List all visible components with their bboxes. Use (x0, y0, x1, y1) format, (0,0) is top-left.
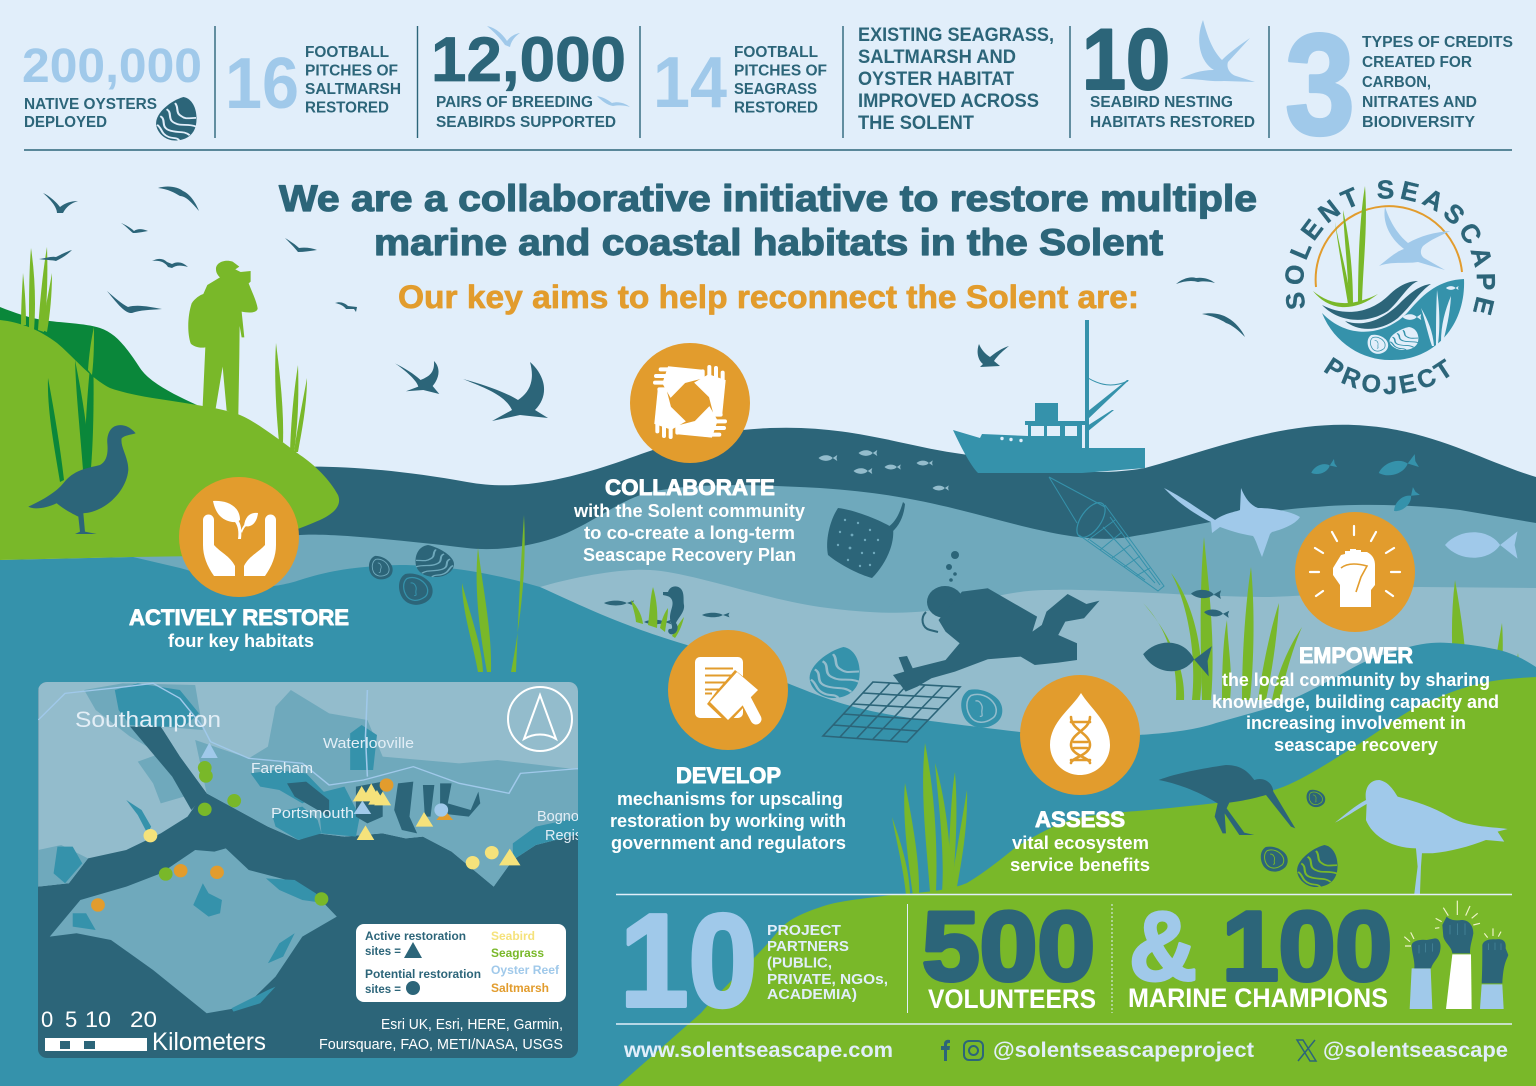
icon: hands holding seedling (203, 501, 276, 576)
stat: 16 football pitches of saltmarsh: SALTMARSH (305, 81, 401, 98)
stat: 16 football pitches of saltmarsh: RESTORED (305, 100, 389, 116)
stat: 16 football pitches of saltmarsh (225, 44, 401, 124)
aim text: develop: DEVELOP (676, 763, 781, 788)
map: place names: Fareham (251, 761, 313, 777)
aim text: assess: service benefits (1010, 855, 1150, 875)
curlew: dark wader (1159, 765, 1295, 835)
map: place names: Regis (545, 828, 582, 844)
icon: document and gavel (695, 657, 760, 724)
map: legend: Seagrass (491, 948, 544, 960)
aim text: assess (1010, 807, 1150, 875)
map: place names: Waterlooville (323, 736, 414, 752)
reeds: top of hill (21, 247, 52, 332)
aim text: develop: mechanisms for upscaling (617, 789, 843, 809)
hill: dark green back slope (0, 307, 197, 405)
aim text: empower: knowledge, building capacity and (1212, 692, 1499, 712)
shark (1164, 488, 1300, 557)
wave: dark teal sea surface (290, 425, 1536, 600)
stat: 10 seabird nesting habitats: HABITATS RESTORED (1090, 114, 1255, 131)
stat: existing habitat improved: IMPROVED ACROSS (858, 91, 1039, 112)
stat: 10 project partners: PROJECT (767, 923, 841, 939)
seagrass at seabed right (1452, 580, 1522, 700)
map: legend (356, 924, 566, 1002)
survey quadrat grid (823, 682, 960, 742)
bottom stats (616, 887, 1512, 1062)
map: place names: Southampton (75, 707, 221, 732)
seagrass: centre blades (462, 515, 525, 672)
icon: x (1297, 1040, 1316, 1061)
map: isle of wight (50, 848, 337, 1013)
stat: 10 project partners: PRIVATE, NGOs, (767, 972, 888, 988)
stat: 10 seabird nesting habitats: 10 (1082, 12, 1170, 108)
map: attribution: Esri UK, Esri, HERE, Garmin, (381, 1016, 563, 1033)
aim text: empower: EMPOWER (1299, 643, 1413, 668)
aim text: empower: increasing involvement in (1246, 713, 1466, 733)
stat: 10 project partners: (PUBLIC, (767, 956, 832, 972)
stat: 100 marine champions (1128, 891, 1392, 1013)
map: legend: sites = (365, 946, 401, 958)
stat: 14 football pitches of seagrass: PITCHES OF (734, 62, 827, 80)
seagrass: lower blades (892, 743, 967, 896)
goose silhouette (28, 425, 136, 534)
stat: 3 types of credits: TYPES OF CREDITS (1362, 34, 1513, 51)
aim: assess (1020, 675, 1140, 795)
aim: develop (668, 630, 788, 750)
stats strip (22, 4, 1513, 165)
stat: 100 marine champions: MARINE CHAMPIONS (1128, 983, 1388, 1013)
hill: green foreground (0, 320, 339, 560)
stat: 10 project partners: ACADEMIA) (767, 987, 857, 1003)
icon: facebook (941, 1040, 950, 1061)
aim text: actively restore: ACTIVELY RESTORE (129, 605, 349, 630)
stat: 12,000 pairs of breeding seabirds: PAIRS OF BREEDING (436, 94, 593, 111)
seahorse and sea plants (631, 586, 684, 638)
birds in the sky (39, 187, 1245, 421)
heading (279, 178, 1257, 263)
project logo: PROJECT (1324, 357, 1450, 394)
wave: light teal mid water (0, 485, 1536, 700)
aim text: develop: restoration by working with (610, 811, 846, 831)
aim text: collaborate: with the Solent community (573, 501, 805, 521)
stat: 3 types of credits: NITRATES AND (1362, 94, 1477, 111)
aim text: empower: the local community by sharing (1222, 670, 1490, 690)
footer links: @solentseascapeproject (993, 1039, 1254, 1062)
stat: existing habitat improved (858, 25, 1054, 134)
aim text: collaborate: COLLABORATE (605, 475, 775, 500)
map: place names (75, 707, 584, 844)
reeds: dark green on hill (48, 345, 94, 482)
stat: 16 football pitches of saltmarsh: 16 (225, 44, 299, 124)
fishing boat (953, 320, 1145, 473)
aim text: collaborate: to co-create a long-term (584, 523, 795, 543)
stingray (827, 502, 905, 578)
map: harbours and water (130, 727, 480, 833)
stat: 500 volunteers: VOLUNTEERS (928, 984, 1096, 1014)
icon: raised fists (1404, 901, 1508, 1009)
stat: 200,000 native oysters (22, 40, 202, 140)
map: scale bar: 10 (85, 1007, 111, 1032)
aim text: develop (610, 763, 846, 853)
icon: instagram (964, 1041, 983, 1060)
stat: 14 football pitches of seagrass: FOOTBALL (734, 44, 818, 61)
map panel (38, 682, 584, 1058)
map: suburban land (38, 683, 582, 887)
map: scale bar: 0 (41, 1007, 53, 1032)
stat: existing habitat improved: EXISTING SEAGRASS, (858, 25, 1054, 46)
aim: collaborate (630, 343, 750, 463)
aim text: assess: vital ecosystem (1012, 833, 1149, 853)
footer links: www.solentseascape.com (623, 1039, 893, 1062)
stat: 10 seabird nesting habitats (1082, 12, 1255, 131)
map: compass (508, 687, 572, 751)
map: urban areas (54, 683, 582, 883)
shoal of fish (604, 450, 1518, 676)
stat: 12,000 pairs of breeding seabirds: SEABIRDS SUPPORTED (436, 114, 616, 131)
stat: 10 project partners (620, 887, 888, 1034)
aim text: collaborate (573, 475, 805, 565)
stat: 100 marine champions: & (1129, 891, 1197, 1001)
aim: empower (1295, 512, 1415, 632)
stat: 14 football pitches of seagrass: RESTORED (734, 100, 818, 116)
wave: pale seabed water (500, 570, 1536, 760)
map: scale bar (41, 1007, 266, 1056)
map: place names: Portsmouth (271, 806, 354, 822)
wave: teal lower water (0, 557, 1536, 1086)
stat: 100 marine champions: 100 (1222, 891, 1392, 1001)
stat: 14 football pitches of seagrass: 14 (653, 43, 727, 123)
stat: 12,000 pairs of breeding seabirds (431, 25, 630, 131)
seagrass clump behind teal wave (1143, 537, 1302, 700)
map: roads (38, 683, 582, 793)
aim text: actively restore (129, 605, 349, 651)
map: place names: Bognor (537, 809, 584, 825)
footer links (623, 1039, 1508, 1062)
reed tip over dark slope (88, 327, 94, 375)
map: attribution (319, 1016, 563, 1053)
stat: 16 football pitches of saltmarsh: FOOTBALL (305, 44, 389, 61)
subheading: Our key aims to help reconnect the Solent are: (398, 279, 1139, 315)
stat: 3 types of credits (1285, 4, 1513, 165)
trawl net (1049, 477, 1164, 591)
map: legend: sites = (365, 984, 401, 996)
stat: 14 football pitches of seagrass (653, 43, 827, 123)
stat: 200,000 native oysters: 200,000 (22, 40, 202, 93)
aim text: develop: government and regulators (611, 833, 846, 853)
heading: marine and coastal habitats in the Solent (374, 222, 1163, 263)
map: scale bar: Kilometers (152, 1028, 266, 1056)
stat: 10 project partners: PARTNERS (767, 939, 849, 955)
stat: existing habitat improved: THE SOLENT (858, 113, 974, 134)
map: scale bar: 5 (65, 1007, 77, 1032)
reeds: right of birdwatcher (275, 343, 307, 452)
map: legend: Active restoration (365, 931, 466, 943)
aim text: empower: seascape recovery (1274, 735, 1438, 755)
stat: 16 football pitches of saltmarsh: PITCHES OF (305, 62, 398, 80)
map: legend: Seabird (491, 931, 535, 943)
map: mainland (38, 682, 582, 887)
icon: raised fist with rays (1310, 526, 1400, 607)
heading: We are a collaborative initiative to restore multiple (279, 178, 1257, 219)
oystercatcher: light wader (1335, 780, 1508, 894)
footer links: @solentseascape (1323, 1039, 1508, 1062)
map: scale bar: 20 (130, 1007, 157, 1032)
stat: 3 types of credits: CARBON, (1362, 74, 1431, 91)
project logo (1285, 180, 1496, 394)
aim text: collaborate: Seascape Recovery Plan (583, 545, 796, 565)
birdwatcher silhouette (188, 261, 258, 416)
aim text: actively restore: four key habitats (168, 631, 314, 651)
logo ring text: SOLENT SEASCAPE (1285, 180, 1496, 316)
stat: 3 types of credits: BIODIVERSITY (1362, 114, 1475, 131)
map: attribution: Foursquare, FAO, METI/NASA, USGS (319, 1036, 563, 1053)
aim: actively restore (179, 477, 299, 597)
aim text: assess: ASSESS (1035, 807, 1125, 832)
stat: 200,000 native oysters: DEPLOYED (24, 114, 107, 131)
icon: water drop with DNA (1050, 693, 1110, 775)
icon: four linked hands (655, 367, 725, 437)
map: legend: Potential restoration (365, 969, 481, 981)
aim text: empower (1212, 643, 1499, 755)
stat: 10 seabird nesting habitats: SEABIRD NESTING (1090, 94, 1233, 111)
stat: 12,000 pairs of breeding seabirds: 12,000 (431, 25, 626, 95)
stat: existing habitat improved: OYSTER HABITAT (858, 69, 1014, 90)
wave: green shore (618, 677, 1536, 1086)
map: legend: Oyster Reef (491, 965, 559, 977)
stat: 14 football pitches of seagrass: SEAGRASS (734, 81, 817, 98)
stat: 3 types of credits: CREATED FOR (1362, 54, 1472, 71)
stat: existing habitat improved: SALTMARSH AND (858, 47, 1016, 68)
stat: 500 volunteers: 500 (922, 891, 1095, 1001)
diver (893, 551, 1100, 692)
map: site markers (91, 743, 520, 912)
stat: 200,000 native oysters: NATIVE OYSTERS (24, 96, 157, 113)
stat: 3 types of credits: 3 (1285, 4, 1355, 165)
map: legend: Saltmarsh (491, 983, 549, 995)
oyster shells on seabed (367, 545, 1338, 887)
stat: 10 project partners: 10 (620, 887, 757, 1034)
